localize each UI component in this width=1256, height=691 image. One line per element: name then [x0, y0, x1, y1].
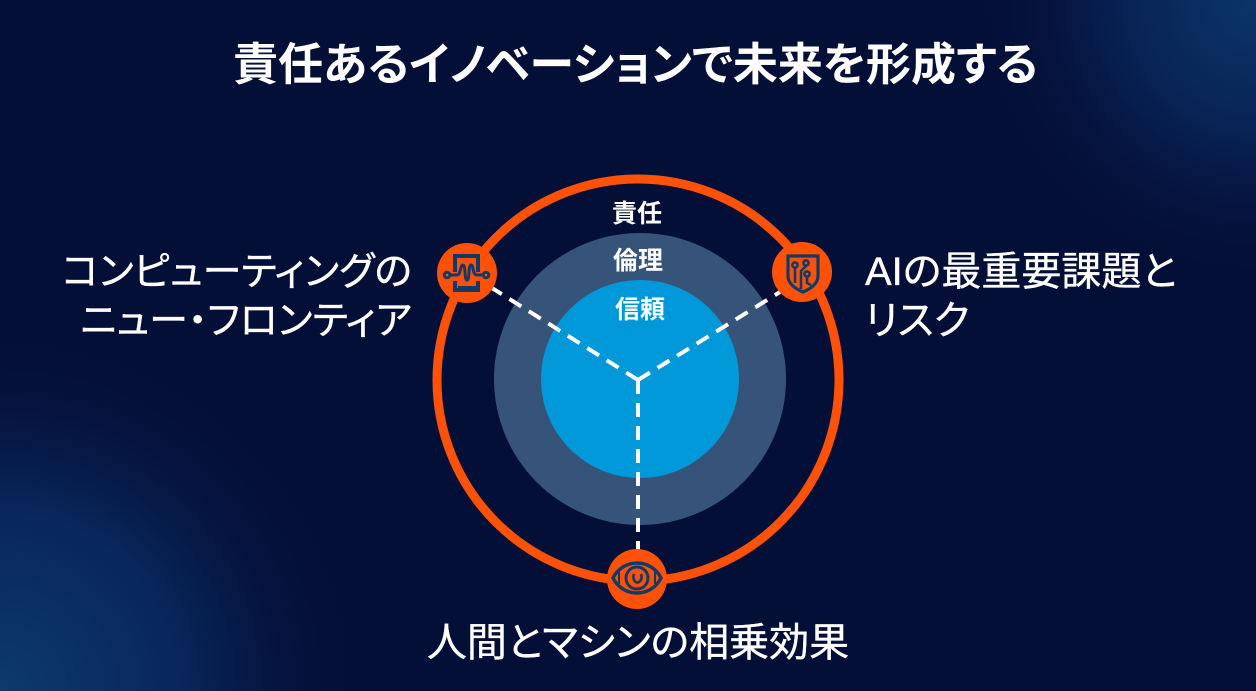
text: human machine synergy: 人間とマシンの相乗効果 — [427, 621, 849, 665]
icon: AI shield — [772, 242, 832, 302]
text: computing frontier: ニュー・フロンティア — [80, 300, 412, 343]
text: AI risks — [864, 250, 1177, 343]
middle circle: ethics — [494, 233, 786, 525]
label: trust: 信頼 — [615, 296, 665, 324]
icon: eye — [607, 549, 667, 609]
text: AI risks: AIの最重要課題と — [865, 250, 1177, 294]
label: responsibility: 責任 — [612, 200, 662, 228]
label: ethics: 倫理 — [613, 247, 663, 275]
inner circle: trust — [541, 280, 739, 478]
dashed connectors — [492, 288, 780, 552]
icon: computing chip — [437, 243, 497, 303]
text: AI risks: リスク — [865, 299, 970, 343]
text: computing frontier — [62, 251, 412, 343]
outer ring: responsibility — [437, 179, 839, 581]
title: 責任あるイノベーションで未来を形成する — [233, 39, 1038, 90]
text: computing frontier: コンピューティングの — [62, 251, 412, 294]
